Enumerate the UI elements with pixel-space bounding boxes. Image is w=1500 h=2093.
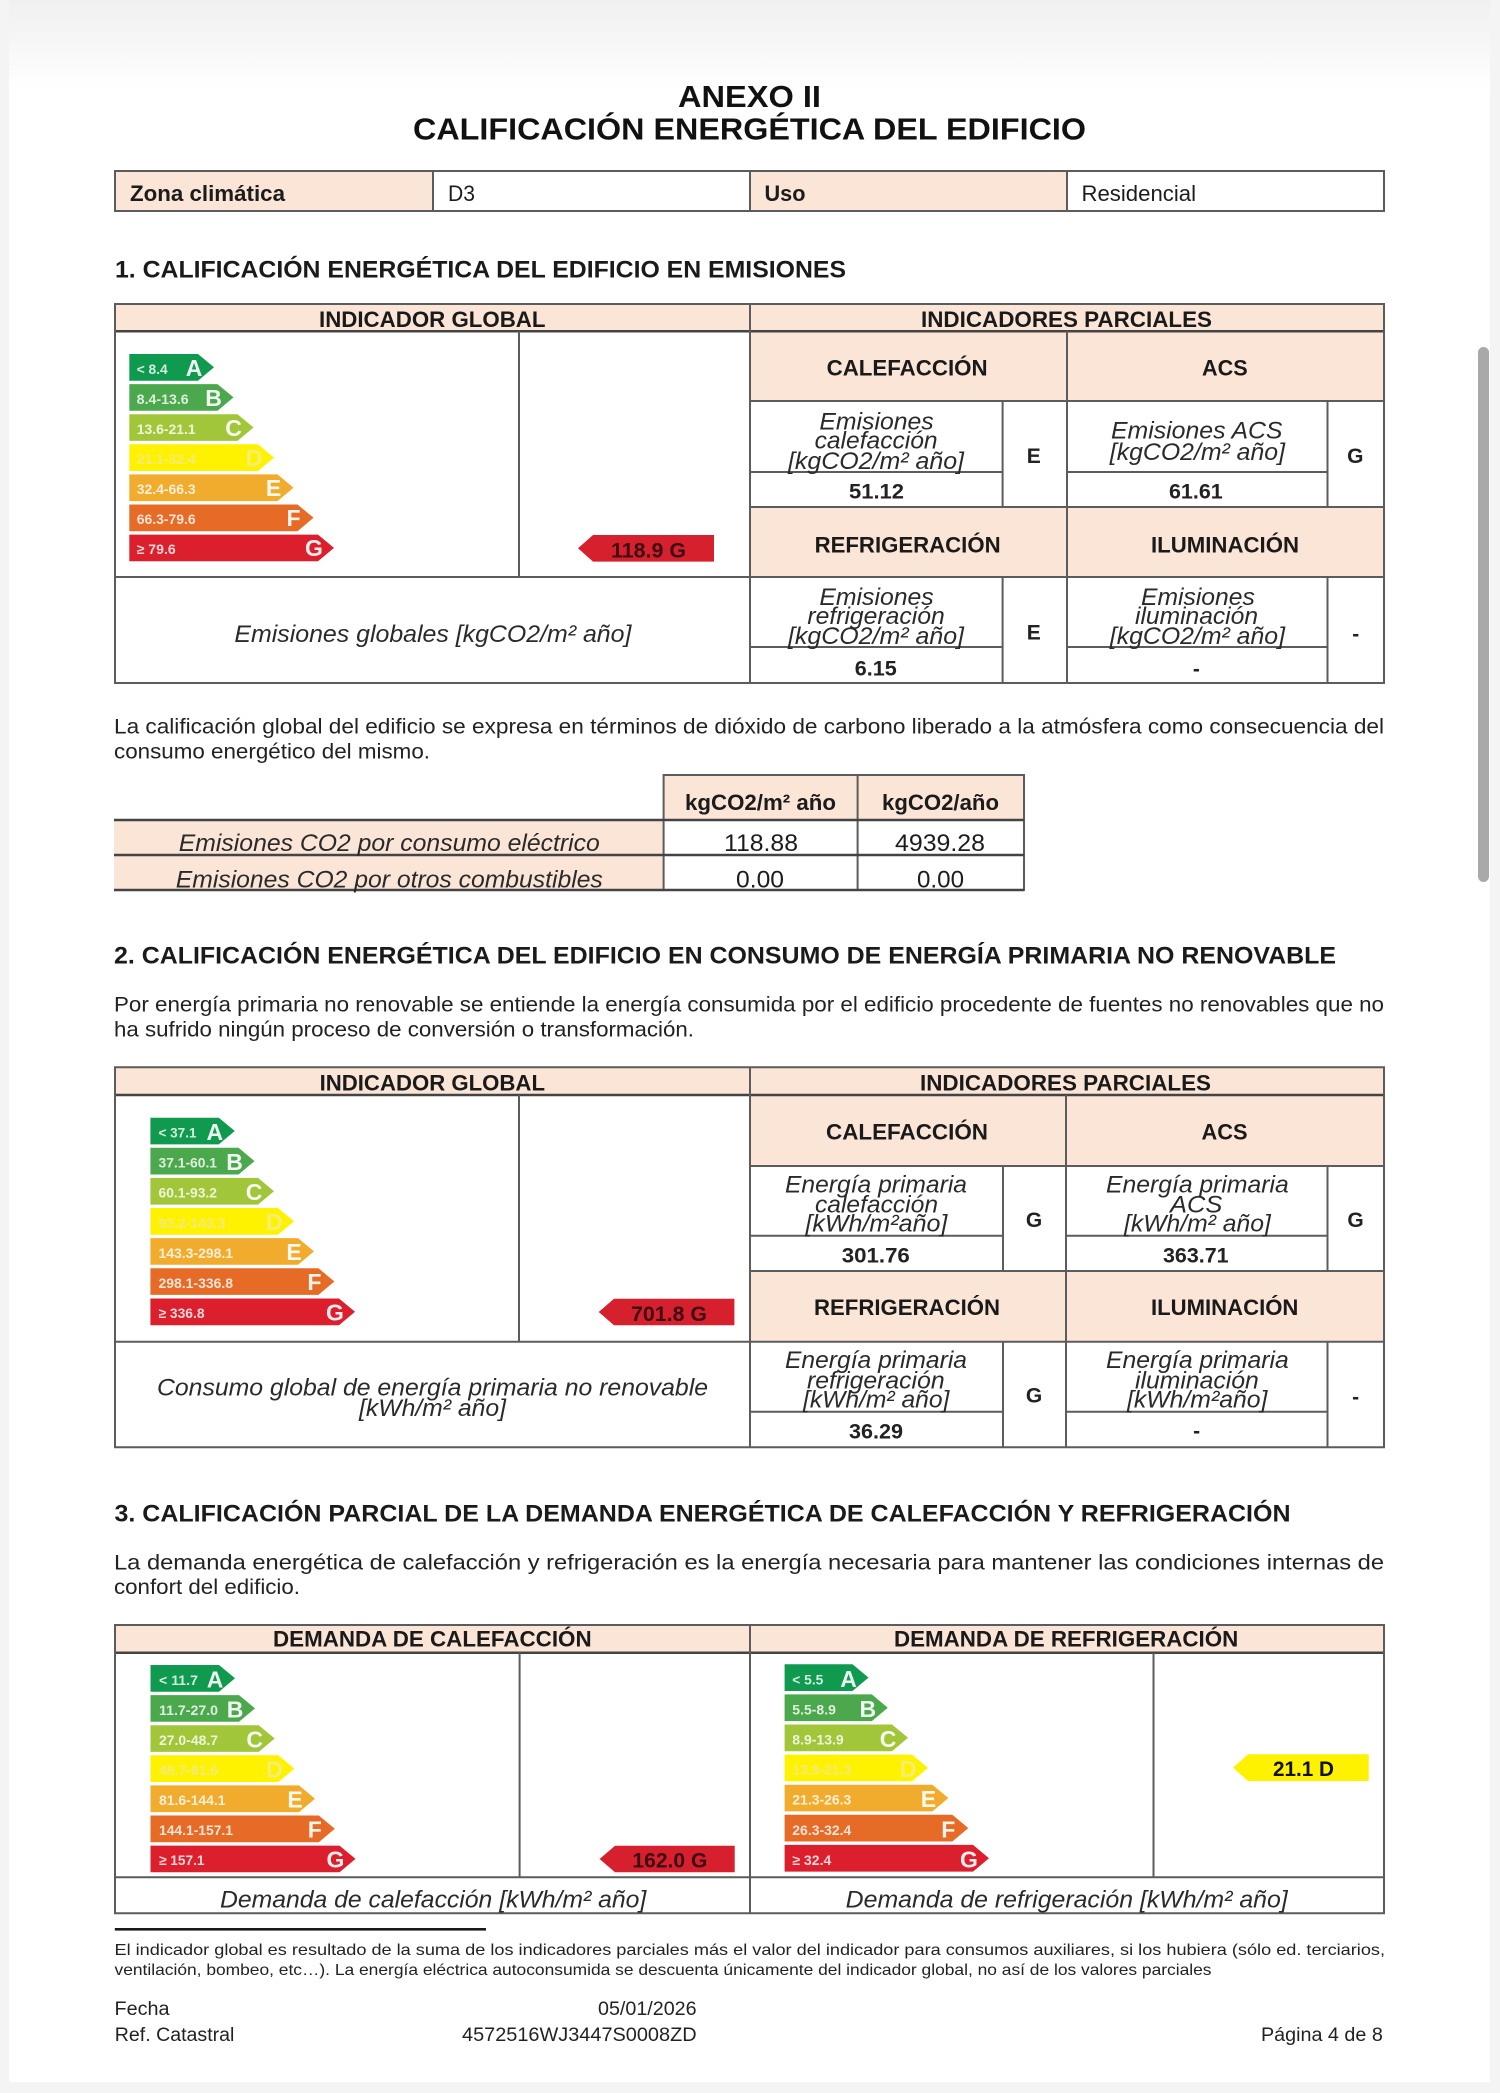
panel: zona climática y uso <box>115 171 1384 211</box>
panel: zona climática y uso: D3 <box>448 181 475 206</box>
cell: iluminación: - <box>1352 1386 1359 1409</box>
cell: calefacción: Emisiones <box>819 408 934 436</box>
energy scale: demanda de calefacción: B <box>227 1696 243 1722</box>
cell: ACS: G <box>1347 445 1363 468</box>
panel: energía primaria table: INDICADOR GLOBAL <box>320 1071 545 1096</box>
page footer: 05/01/2026 <box>598 1999 697 2020</box>
cell: calefacción: G <box>1026 1209 1042 1232</box>
energy scale: demanda de refrigeración: F <box>941 1816 955 1842</box>
cell: ACS: G <box>1347 1209 1364 1232</box>
cell: calefacción: 301.76 <box>842 1244 910 1267</box>
rating arrow: 701.8 G: 701.8 G <box>631 1303 707 1326</box>
cell: calefacción: calefacción <box>815 428 938 455</box>
panel: energía primaria table <box>115 1067 1384 1447</box>
energy scale: demanda de refrigeración: E <box>921 1786 936 1812</box>
panel: zona climática y uso: Residencial <box>1082 181 1196 206</box>
text: explicación emisiones <box>114 715 1384 763</box>
energy scale: consumo: ≥ 336.8 <box>158 1305 205 1321</box>
text: explicación demanda: La demanda energética de calefacción y refrigeración es la energía necesaria para mantener las condiciones internas de <box>114 1551 1384 1574</box>
energy scale: demanda de calefacción: < 11.7 <box>159 1672 198 1688</box>
energy scale: consumo: G <box>326 1300 344 1326</box>
cell: iluminación: Emisiones <box>1141 584 1255 611</box>
rating arrow: 701.8 G <box>599 1299 734 1326</box>
text: explicación demanda: confort del edificio. <box>114 1576 300 1599</box>
text: explicación energía primaria <box>114 994 1384 1042</box>
energy scale: demanda de refrigeración: C <box>880 1726 896 1752</box>
cell: refrigeración: [kgCO2/m² año] <box>787 623 965 650</box>
energy scale: consumo <box>150 1118 355 1326</box>
energy scale: demanda de calefacción: 144.1-157.1 <box>159 1822 233 1838</box>
energy scale: consumo: 298.1-336.8 <box>158 1275 233 1291</box>
cell: iluminación: iluminación <box>1135 1367 1259 1394</box>
energy scale: consumo: 60.1-93.2 <box>158 1185 217 1201</box>
energy scale: demanda de calefacción: A <box>207 1666 223 1692</box>
cell: iluminación: - <box>1352 623 1359 646</box>
energy scale: demanda de calefacción: G <box>327 1846 344 1872</box>
footnote: ventilación, bombeo, etc…). La energía eléctrica autoconsumida se descuenta únicamente del indicador global, no así de los valores parciales <box>114 1962 1212 1979</box>
label: demanda de calefacción: Demanda de calefacción [kWh/m² año] <box>220 1887 648 1914</box>
energy scale: emisiones: G <box>305 535 323 561</box>
cell: refrigeración <box>787 533 1041 680</box>
panel: zona climática y uso: Zona climática <box>130 181 286 206</box>
energy scale: emisiones: F <box>286 505 301 531</box>
rating arrow: 162.0 G: 162.0 G <box>632 1850 707 1872</box>
panel: emisiones CO2 table: Emisiones CO2 por consumo eléctrico <box>179 830 600 857</box>
panel: emisiones table: INDICADOR GLOBAL <box>319 307 546 332</box>
cell: iluminación: [kgCO2/m² año] <box>1109 623 1286 650</box>
text: explicación emisiones: La calificación global del edificio se expresa en términos de dióxido de carbono liberado a la atmósfera como consecuencia del <box>114 715 1384 738</box>
page footer: Página 4 de 8 <box>1261 2025 1383 2046</box>
energy scale: demanda de refrigeración: < 5.5 <box>792 1671 824 1687</box>
rating arrow: 118.9 G <box>578 535 714 562</box>
panel: emisiones CO2 table: 4939.28 <box>895 830 985 857</box>
energy scale: consumo: 93.2-143.3 <box>158 1215 226 1231</box>
energy scale: demanda de refrigeración: 8.9-13.9 <box>792 1732 844 1748</box>
energy scale: emisiones: 13.6-21.1 <box>137 421 196 437</box>
cell: calefacción: Energía primaria <box>785 1171 967 1198</box>
energy scale: emisiones: 66.3-79.6 <box>137 511 196 527</box>
cell: iluminación: - <box>1193 658 1200 681</box>
label: emisiones globales: Emisiones globales [kgCO2/m² año] <box>234 621 633 648</box>
title: CALIFICACIÓN ENERGÉTICA DEL EDIFICIO <box>413 110 1086 146</box>
cell: refrigeración: Energía primaria <box>785 1347 967 1374</box>
cell: ACS: ACS <box>1202 1119 1248 1144</box>
energy scale: emisiones: B <box>205 385 222 411</box>
energy scale: consumo: C <box>246 1179 262 1205</box>
label: consumo global: [kWh/m² año] <box>358 1395 507 1422</box>
energy scale: emisiones: ≥ 79.6 <box>137 541 176 557</box>
title: ANEXO II <box>678 79 821 114</box>
energy scale: consumo: D <box>266 1209 282 1235</box>
energy scale: emisiones: < 8.4 <box>137 361 168 377</box>
panel: emisiones CO2 table: Emisiones CO2 por otros combustibles <box>176 867 603 894</box>
text: explicación energía primaria: Por energía primaria no renovable se entiende la energía consumida por el edificio procedente de fuentes no renovables que no <box>114 994 1384 1017</box>
page footer <box>114 1999 1383 2046</box>
footnote rule <box>115 1928 486 1931</box>
cell: refrigeración: Emisiones <box>819 584 934 611</box>
cell: refrigeración: 36.29 <box>849 1420 903 1443</box>
cell: iluminación: Energía primaria <box>1106 1347 1289 1374</box>
title <box>413 79 1086 146</box>
scrollbar <box>1478 347 1489 882</box>
cell: refrigeración: REFRIGERACIÓN <box>814 1295 1000 1320</box>
cell: calefacción: [kgCO2/m² año] <box>787 448 965 475</box>
cell: calefacción: CALEFACCIÓN <box>827 355 988 380</box>
cell: calefacción <box>787 355 1041 504</box>
text: explicación energía primaria: ha sufrido ningún proceso de conversión o transformación. <box>114 1019 694 1042</box>
energy scale: demanda de refrigeración: 13.9-21.3 <box>792 1762 851 1778</box>
energy scale: demanda de refrigeración: 26.3-32.4 <box>792 1822 851 1838</box>
page footer: Fecha <box>114 1999 170 2020</box>
energy scale: demanda de calefacción: C <box>246 1726 263 1752</box>
heading: section 1: 1. CALIFICACIÓN ENERGÉTICA DEL EDIFICIO EN EMISIONES <box>115 256 846 284</box>
cell: iluminación: ILUMINACIÓN <box>1151 1295 1298 1320</box>
energy scale: demanda de calefacción: 27.0-48.7 <box>159 1732 218 1748</box>
panel: emisiones table <box>115 304 1384 683</box>
cell: ACS: ACS <box>1168 1191 1222 1218</box>
energy scale: demanda de refrigeración: D <box>900 1756 916 1782</box>
footnote: El indicador global es resultado de la suma de los indicadores parciales más el valor del indicador para consumos auxiliares, si los hubiera (sólo ed. terciarios, <box>114 1942 1385 1959</box>
energy scale: consumo: 37.1-60.1 <box>158 1155 217 1171</box>
text: explicación emisiones: consumo energético del mismo. <box>114 740 430 763</box>
panel: emisiones CO2 table <box>114 775 1024 894</box>
rating arrow: 21.1 D <box>1233 1754 1369 1781</box>
cell: iluminación: - <box>1193 1420 1200 1443</box>
panel: emisiones CO2 table: kgCO2/m² año <box>685 790 836 815</box>
cell: iluminación: ILUMINACIÓN <box>1151 533 1299 558</box>
cell: refrigeración: [kWh/m² año] <box>802 1387 951 1414</box>
energy scale: consumo: 143.3-298.1 <box>158 1245 233 1261</box>
cell: refrigeración: G <box>1026 1384 1042 1408</box>
panel: demanda table: DEMANDA DE CALEFACCIÓN <box>273 1627 592 1652</box>
cell: refrigeración: refrigeración <box>807 1367 945 1394</box>
label: consumo global <box>157 1375 708 1422</box>
panel: emisiones CO2 table: kgCO2/año <box>882 790 999 815</box>
heading: section 3: 3. CALIFICACIÓN PARCIAL DE LA DEMANDA ENERGÉTICA DE CALEFACCIÓN Y REFRIGERACIÓN <box>114 1500 1291 1528</box>
cell: refrigeración <box>785 1295 1042 1443</box>
cell: iluminación: iluminación <box>1135 603 1258 630</box>
energy scale: demanda de refrigeración: A <box>840 1666 857 1692</box>
cell: calefacción: E <box>1027 445 1041 468</box>
energy scale: demanda de calefacción: F <box>308 1816 322 1842</box>
cell: refrigeración: refrigeración <box>807 603 945 630</box>
energy scale: demanda de refrigeración: 21.3-26.3 <box>792 1792 851 1808</box>
energy scale: consumo: A <box>206 1119 223 1145</box>
panel: energía primaria table: INDICADORES PARCIALES <box>920 1071 1211 1096</box>
footnote <box>114 1942 1385 1979</box>
cell: calefacción: [kWh/m²año] <box>804 1211 949 1238</box>
energy scale: consumo: E <box>286 1239 302 1265</box>
energy scale: emisiones: A <box>186 355 202 381</box>
energy scale: emisiones: D <box>246 445 262 471</box>
panel: zona climática y uso: Uso <box>764 181 806 206</box>
energy scale: consumo: < 37.1 <box>158 1124 197 1140</box>
energy scale: consumo: B <box>226 1149 243 1175</box>
rating arrow: 162.0 G <box>600 1846 735 1872</box>
energy scale: demanda de calefacción: ≥ 157.1 <box>159 1852 205 1868</box>
energy scale: demanda de refrigeración: B <box>859 1696 876 1722</box>
panel: emisiones table: INDICADORES PARCIALES <box>921 307 1212 332</box>
cell: calefacción: CALEFACCIÓN <box>826 1119 988 1144</box>
cell: ACS: 363.71 <box>1163 1244 1229 1267</box>
energy scale: emisiones: 8.4-13.6 <box>137 391 189 407</box>
energy scale: emisiones: 21.1-32.4 <box>137 451 196 467</box>
energy scale: demanda de refrigeración <box>785 1664 989 1872</box>
energy scale: demanda de refrigeración: 5.5-8.9 <box>792 1701 836 1717</box>
rating arrow: 21.1 D: 21.1 D <box>1273 1758 1334 1781</box>
cell: iluminación: [kWh/m²año] <box>1126 1387 1269 1414</box>
panel: demanda table <box>115 1625 1384 1914</box>
cell: iluminación <box>1106 1295 1359 1443</box>
rating arrow: 118.9 G: 118.9 G <box>611 540 686 562</box>
energy scale: demanda de calefacción: E <box>287 1786 303 1812</box>
page footer: 4572516WJ3447S0008ZD <box>462 2025 697 2046</box>
panel: demanda table: DEMANDA DE REFRIGERACIÓN <box>894 1627 1238 1652</box>
energy scale: demanda de calefacción: 11.7-27.0 <box>159 1702 218 1718</box>
label: demanda de refrigeración: Demanda de refrigeración [kWh/m² año] <box>846 1887 1289 1914</box>
cell: ACS: Energía primaria <box>1106 1171 1289 1198</box>
cell: ACS <box>1109 355 1363 504</box>
label: consumo global: Consumo global de energía primaria no renovable <box>157 1375 708 1402</box>
cell: ACS: ACS <box>1202 355 1248 380</box>
cell: refrigeración: 6.15 <box>855 657 897 680</box>
energy scale: emisiones: E <box>266 475 281 501</box>
energy scale: emisiones: C <box>225 415 242 441</box>
cell: iluminación <box>1109 533 1359 681</box>
energy scale: demanda de calefacción: 48.7-81.6 <box>159 1762 218 1778</box>
energy scale: emisiones <box>129 354 334 561</box>
text: explicación demanda <box>114 1551 1384 1599</box>
energy scale: consumo: F <box>307 1269 321 1295</box>
energy scale: demanda de calefacción: 81.6-144.1 <box>159 1792 226 1808</box>
energy scale: emisiones: 32.4-66.3 <box>137 481 196 497</box>
cell: ACS: [kWh/m² año] <box>1123 1211 1272 1238</box>
cell: ACS: [kgCO2/m² año] <box>1109 439 1286 466</box>
panel: emisiones CO2 table: 0.00 <box>917 867 964 894</box>
cell: refrigeración: REFRIGERACIÓN <box>815 533 1001 558</box>
panel: emisiones CO2 table: 118.88 <box>724 830 798 857</box>
energy scale: demanda de calefacción: D <box>266 1756 283 1782</box>
energy scale: demanda de calefacción <box>150 1665 356 1872</box>
cell: calefacción <box>785 1119 1042 1267</box>
page footer: Ref. Catastral <box>115 2025 234 2046</box>
energy scale: demanda de refrigeración: ≥ 32.4 <box>792 1852 832 1868</box>
cell: ACS <box>1106 1119 1364 1267</box>
cell: ACS: 61.61 <box>1169 481 1223 504</box>
cell: ACS: Emisiones ACS <box>1111 417 1282 444</box>
cell: calefacción: calefacción <box>815 1191 938 1218</box>
cell: refrigeración: E <box>1027 622 1041 644</box>
energy scale: demanda de refrigeración: G <box>960 1846 978 1872</box>
panel: emisiones CO2 table: 0.00 <box>736 867 784 894</box>
heading: section 2: 2. CALIFICACIÓN ENERGÉTICA DEL EDIFICIO EN CONSUMO DE ENERGÍA PRIMARIA NO RENOVABLE <box>114 941 1336 969</box>
cell: calefacción: 51.12 <box>849 481 904 504</box>
